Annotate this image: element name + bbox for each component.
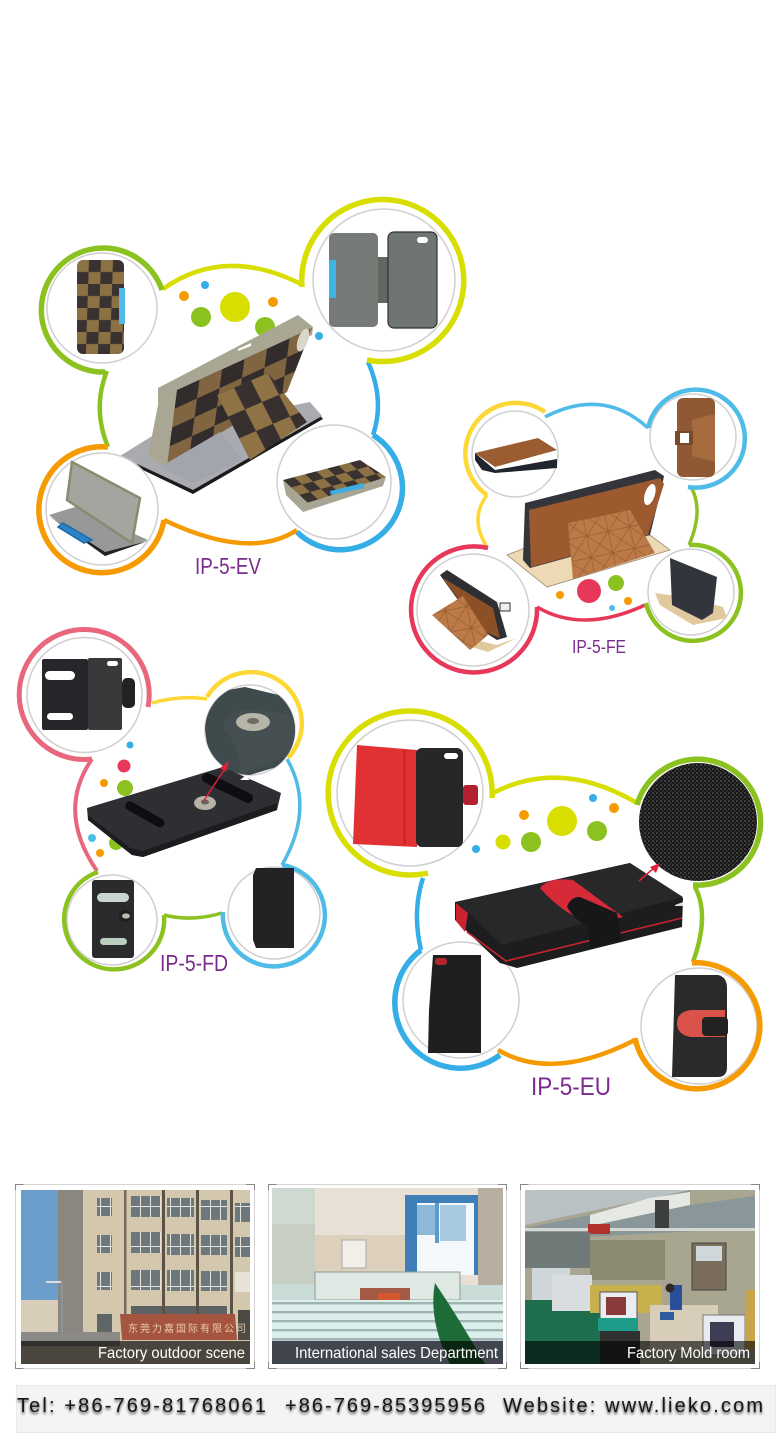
photo circle: EU back (395, 942, 519, 1068)
dots: FE (556, 575, 632, 611)
photo circle: EV open interior (302, 200, 464, 362)
dots: FD (88, 742, 134, 857)
panel: IP-5-EV product cluster (39, 200, 464, 579)
photo circle: EV closed front (41, 248, 162, 372)
main product: FD black case with snap (87, 761, 281, 857)
panel: IP-5-FD product cluster (19, 629, 325, 976)
connector outline: EV (100, 266, 378, 543)
photo circle: EU leather texture (637, 759, 761, 885)
connector outline: FE (478, 404, 697, 620)
arrow: EU texture callout (639, 863, 660, 881)
dots: EV (179, 281, 323, 340)
photo circle: FE black stand back (646, 545, 741, 641)
photo circle: FE brown on stand (411, 546, 537, 672)
photo circle: EV closed angled view (277, 425, 402, 550)
caption: Factory Mold room (627, 1345, 750, 1362)
telephone number two: +86-769-85395956 (285, 1395, 485, 1417)
photo circle: FD snap button close-up (200, 672, 302, 778)
photo panel: International sales Department (268, 1184, 506, 1368)
photo circle: FD back (223, 865, 325, 966)
caption: Factory outdoor scene (98, 1345, 245, 1362)
caption: International sales Department (295, 1345, 499, 1362)
connector outline: EU (417, 778, 702, 1064)
photo circle: FD open view (19, 629, 149, 759)
main product: EU black wallet with red clasp (455, 863, 683, 968)
photo circle: EV interior on stand (39, 447, 164, 573)
connector outline: FD (75, 698, 300, 918)
photo panel: Factory Mold room (520, 1184, 760, 1368)
contact bar (16, 1386, 776, 1432)
arrow: FD snap callout (203, 761, 229, 802)
telephone number one: Tel: +86-769-81768061 (17, 1395, 266, 1417)
model label: IP-5-FE: IP-5-FE (572, 637, 626, 657)
panel: IP-5-FE product cluster (411, 390, 745, 672)
model label: IP-5-FD: IP-5-FD (160, 950, 228, 976)
photo circle: FE closed side (465, 403, 558, 497)
main product: FE brown case on stand (507, 470, 670, 587)
panel: IP-5-EU product cluster (328, 711, 761, 1101)
photo panel: Factory outdoor scene: 东莞力嘉国际有限公司 (128, 1322, 248, 1335)
website: Website: www.lieko.com (503, 1395, 763, 1417)
photo panel: Factory outdoor scene (16, 1184, 254, 1368)
photo circle: EU open red interior (328, 711, 492, 875)
dots: EU (472, 794, 619, 853)
main product: EV checked case on stand (120, 315, 323, 494)
model label: IP-5-EV: IP-5-EV (195, 553, 262, 579)
photo circle: EU front with clasp (635, 963, 760, 1089)
model label: IP-5-EU: IP-5-EU (531, 1073, 611, 1101)
photo circle: FE back with flap (648, 390, 745, 488)
photo circle: FD front windows (64, 872, 164, 969)
